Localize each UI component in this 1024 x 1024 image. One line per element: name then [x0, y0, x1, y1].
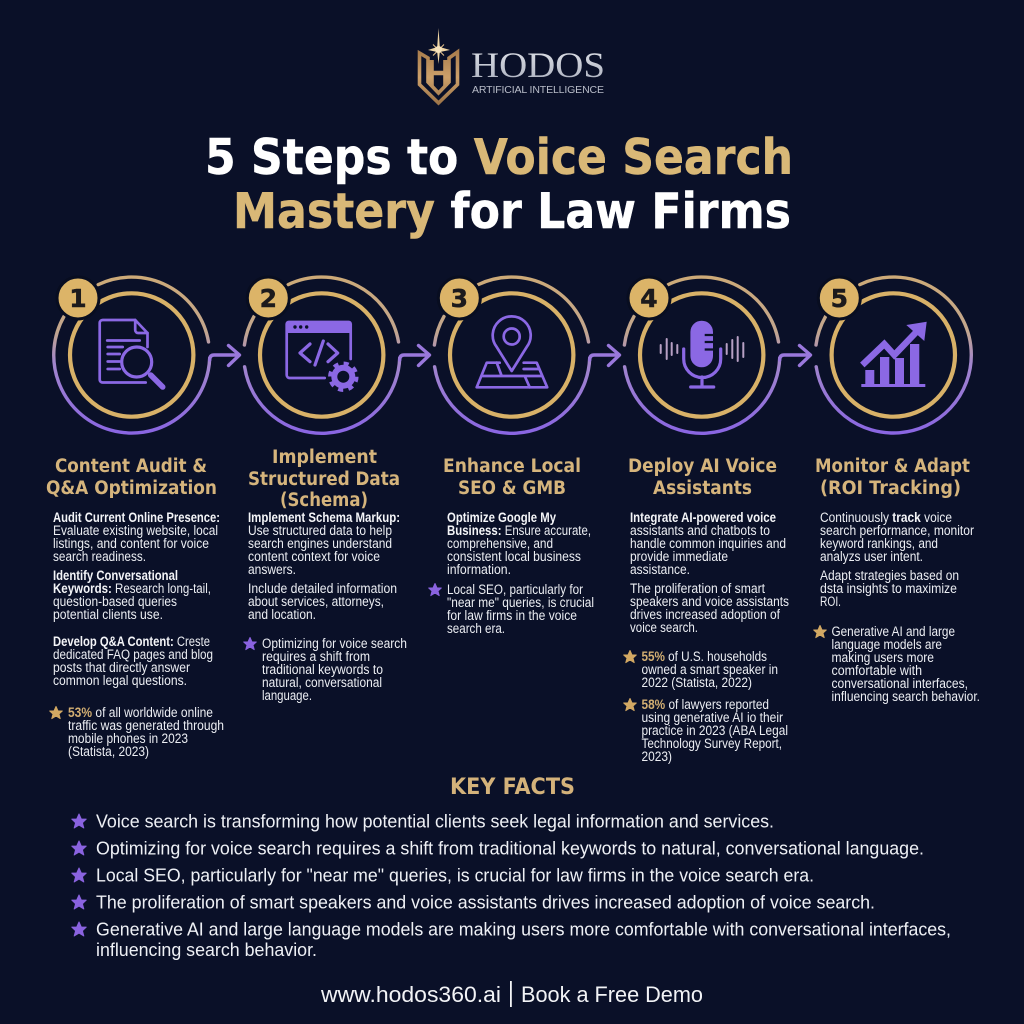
step 2 callout: language. — [262, 688, 312, 703]
number badge 5 — [818, 277, 860, 319]
step 2 heading: (Schema) — [280, 490, 368, 511]
step 4 statistic: smart speakers — [642, 649, 778, 690]
step 3 text: information. — [447, 562, 511, 577]
step 4 text: handle common inquiries and — [630, 536, 786, 551]
step 4 statistic: smart speakers: owned a smart speaker in — [642, 662, 778, 677]
step 5 heading — [815, 456, 970, 499]
panel: step 2 graphic — [244, 277, 400, 433]
step 4 text: provide immediate — [630, 549, 728, 564]
outer arcs — [816, 277, 971, 433]
step 4 statistic: lawyers: using generative AI io their — [642, 710, 783, 725]
gold star bullet — [624, 698, 636, 711]
step 1 text: Evaluate existing website, local — [53, 523, 218, 538]
number badge 2: 2 — [260, 284, 277, 313]
icon: rising bar chart with arrow — [861, 322, 927, 386]
step 5 callout: Generative AI and large — [832, 624, 955, 639]
step 4 heading: Deploy AI Voice — [628, 456, 777, 477]
step 4 text: The proliferation of smart — [630, 581, 765, 596]
step 1 text: dedicated FAQ pages and blog — [53, 647, 213, 662]
step 2 text: Use structured data to help — [248, 523, 392, 538]
number badge 4 — [628, 277, 670, 319]
step 2 text — [244, 510, 407, 703]
inner ring — [832, 293, 955, 417]
step 5 text — [814, 510, 980, 704]
title: Mastery for Law Firms — [233, 183, 791, 240]
number badge 2 — [247, 277, 289, 319]
step 2 text: search engines understand — [248, 536, 392, 551]
step 5 callout: language models are — [832, 637, 942, 652]
icon: document with magnifier — [100, 320, 163, 387]
key fact 3: Local SEO, particularly for "near me" queries, is crucial for law firms in the voice search era. — [96, 866, 814, 886]
step 2 callout: requires a shift from — [262, 649, 370, 664]
icon: microphone with sound waves — [661, 321, 743, 387]
number badge 3: 3 — [451, 284, 468, 313]
key fact 5 — [72, 920, 951, 960]
title — [205, 129, 793, 240]
step 1 text: search readiness. — [53, 549, 146, 564]
step 1 text — [50, 510, 224, 759]
step 2 text: content context for voice — [248, 549, 380, 564]
inner ring — [260, 293, 383, 417]
arrow: step 4 to 5 — [780, 346, 810, 366]
number badge 3 — [438, 277, 480, 319]
heading: key facts: KEY FACTS — [450, 775, 575, 800]
panel: key facts list — [72, 812, 951, 960]
step 2 callout: Optimizing for voice search — [262, 636, 407, 651]
gold star bullet — [50, 706, 62, 719]
step 2 callout: natural, conversational — [262, 675, 382, 690]
step 3 text: comprehensive, and — [447, 536, 553, 551]
step 1 text: Identify Conversational — [53, 568, 178, 583]
step 4 text: assistants and chatbots to — [630, 523, 770, 538]
key fact 5: Generative AI and large language models are making users more comfortable with conversational interfaces, — [96, 920, 951, 940]
icon: map pin on map — [477, 316, 547, 387]
step 4 heading: Assistants — [653, 478, 752, 499]
step 5 callout: making users more — [832, 650, 934, 665]
footer: www.hodos360.ai — [320, 982, 501, 1007]
step 3 callout: "near me" queries, is crucial — [447, 595, 594, 610]
arrow: step 1 to 2 — [210, 346, 240, 366]
step 2 callout — [262, 636, 407, 703]
step 3 callout: search era. — [447, 621, 505, 636]
panel: step 4 graphic — [624, 277, 780, 433]
step 5 text: keyword rankings, and — [820, 536, 938, 551]
step 3 heading: SEO & GMB — [458, 478, 566, 499]
inner ring — [450, 293, 573, 417]
step 5 text: Continuously track voice — [820, 510, 952, 525]
outer arcs — [434, 277, 590, 433]
purple star bullet — [429, 584, 441, 596]
key fact 1: Voice search is transforming how potential clients seek legal information and services. — [96, 812, 774, 832]
step 1 statistic: mobile phones in 2023 — [68, 731, 188, 746]
step 5 callout: conversational interfaces, — [832, 676, 968, 691]
step 3 text: consistent local business — [447, 549, 581, 564]
step 2 text: about services, attorneys, — [248, 594, 384, 609]
outer arcs — [54, 277, 210, 433]
key fact 5: influencing search behavior. — [96, 940, 317, 960]
step 3 callout: Local SEO, particularly for — [447, 582, 583, 597]
purple star bullet — [244, 638, 256, 650]
step 2 text: and location. — [248, 607, 316, 622]
inner ring — [70, 293, 193, 417]
panel: step 5 graphic — [816, 277, 971, 433]
logo: Hodos Artificial Intelligence — [420, 28, 605, 103]
step 4 text: assistance. — [630, 562, 690, 577]
step 4 heading — [628, 456, 777, 499]
step 4 text: voice search. — [630, 620, 698, 635]
footer: Book a Free Demo — [521, 982, 703, 1007]
arrow: step 3 to 4 — [590, 346, 620, 366]
step 1 text: posts that directly answer — [53, 660, 190, 675]
step 5 text: analyzs user intent. — [820, 549, 923, 564]
panel: step 1 graphic — [54, 277, 210, 433]
step 1 heading — [46, 456, 217, 499]
step 1 statistic: (Statista, 2023) — [68, 744, 149, 759]
step 4 statistic: smart speakers: 2022 (Statista, 2022) — [642, 675, 752, 690]
step 1 text: Audit Current Online Presence: — [53, 510, 220, 525]
step 4 statistic: lawyers: Technology Survey Report, — [642, 736, 782, 751]
step 1 text: potential clients use. — [53, 607, 163, 622]
step 5 callout — [832, 624, 980, 704]
step 1 statistic: traffic was generated through — [68, 718, 224, 733]
step 2 callout: traditional keywords to — [262, 662, 383, 677]
step 4 text: Integrate AI-powered voice — [630, 510, 776, 525]
step 2 text: Include detailed information — [248, 581, 397, 596]
step 5 text: dsta insights to maximize — [820, 581, 957, 596]
panel: step 3 graphic — [434, 277, 590, 433]
step 4 statistic: lawyers — [642, 697, 788, 764]
arrow: step 2 to 3 — [400, 346, 430, 366]
step 2 heading — [248, 447, 400, 511]
step 1 heading: Content Audit & — [55, 456, 207, 477]
step 3 heading: Enhance Local — [443, 456, 581, 477]
step 2 heading: Implement — [272, 447, 377, 468]
step 1 heading: Q&A Optimization — [46, 478, 217, 499]
key fact 2: Optimizing for voice search requires a shift from traditional keywords to natural, conversational language. — [96, 838, 924, 858]
step 5 heading: Monitor & Adapt — [815, 456, 970, 477]
step 5 text: search performance, monitor — [820, 523, 974, 538]
footer — [320, 981, 703, 1007]
step 4 statistic: smart speakers: 55% of U.S. households — [642, 649, 767, 664]
step 5 callout: comfortable with — [832, 663, 922, 678]
step 3 heading — [443, 456, 581, 499]
step 3 callout: for law firms in the voice — [447, 608, 577, 623]
step 4 text: drives increased adoption of — [630, 607, 780, 622]
step 2 text: Implement Schema Markup: — [248, 510, 400, 525]
step 1 text: listings, and content for voice — [53, 536, 209, 551]
number badge 4: 4 — [640, 284, 658, 313]
step 1 statistic — [68, 705, 224, 759]
logo wordmark: HODOS — [471, 45, 605, 85]
step 5 text: ROI. — [820, 594, 841, 609]
step 3 text — [429, 510, 594, 636]
inner ring — [640, 293, 763, 417]
step 1 text: Keywords: Research long-tail, — [53, 581, 211, 596]
logo tagline: ARTIFICIAL INTELLIGENCE — [472, 84, 604, 96]
title: 5 Steps to Voice Search — [205, 129, 793, 186]
step 5 heading: (ROI Tracking) — [820, 478, 961, 499]
outer arcs — [624, 277, 780, 433]
step 4 statistic: lawyers: 58% of lawyers reported — [642, 697, 769, 712]
step 4 statistic: lawyers: practice in 2023 (ABA Legal — [642, 723, 788, 738]
icon: shield with star — [420, 28, 458, 103]
number badge 1: 1 — [69, 284, 87, 313]
number badge 1 — [57, 277, 99, 319]
step 4 text — [624, 510, 789, 764]
gold star bullet — [624, 650, 636, 663]
step 2 text: answers. — [248, 562, 296, 577]
step 3 text: Business: Ensure accurate, — [447, 523, 591, 538]
step 4 statistic: lawyers: 2023) — [642, 749, 672, 764]
step 3 text: Optimize Google My — [447, 510, 556, 525]
step 1 text: Develop Q&A Content: Creste — [53, 634, 210, 649]
step 1 statistic: 53% of all worldwide online — [68, 705, 213, 720]
step 5 callout: influencing search behavior. — [832, 689, 980, 704]
step 3 callout — [447, 582, 594, 636]
step 1 text: question-based queries — [53, 594, 177, 609]
step 1 text: common legal questions. — [53, 673, 187, 688]
outer arcs — [244, 277, 400, 433]
number badge 5: 5 — [831, 284, 848, 313]
icon: code window with gear — [287, 321, 360, 394]
key fact 4: The proliferation of smart speakers and voice assistants drives increased adoption of voice search. — [96, 892, 875, 912]
step 2 heading: Structured Data — [248, 469, 400, 490]
step 4 text: speakers and voice assistants — [630, 594, 789, 609]
step 5 text: Adapt strategies based on — [820, 568, 959, 583]
gold star bullet — [814, 626, 826, 638]
